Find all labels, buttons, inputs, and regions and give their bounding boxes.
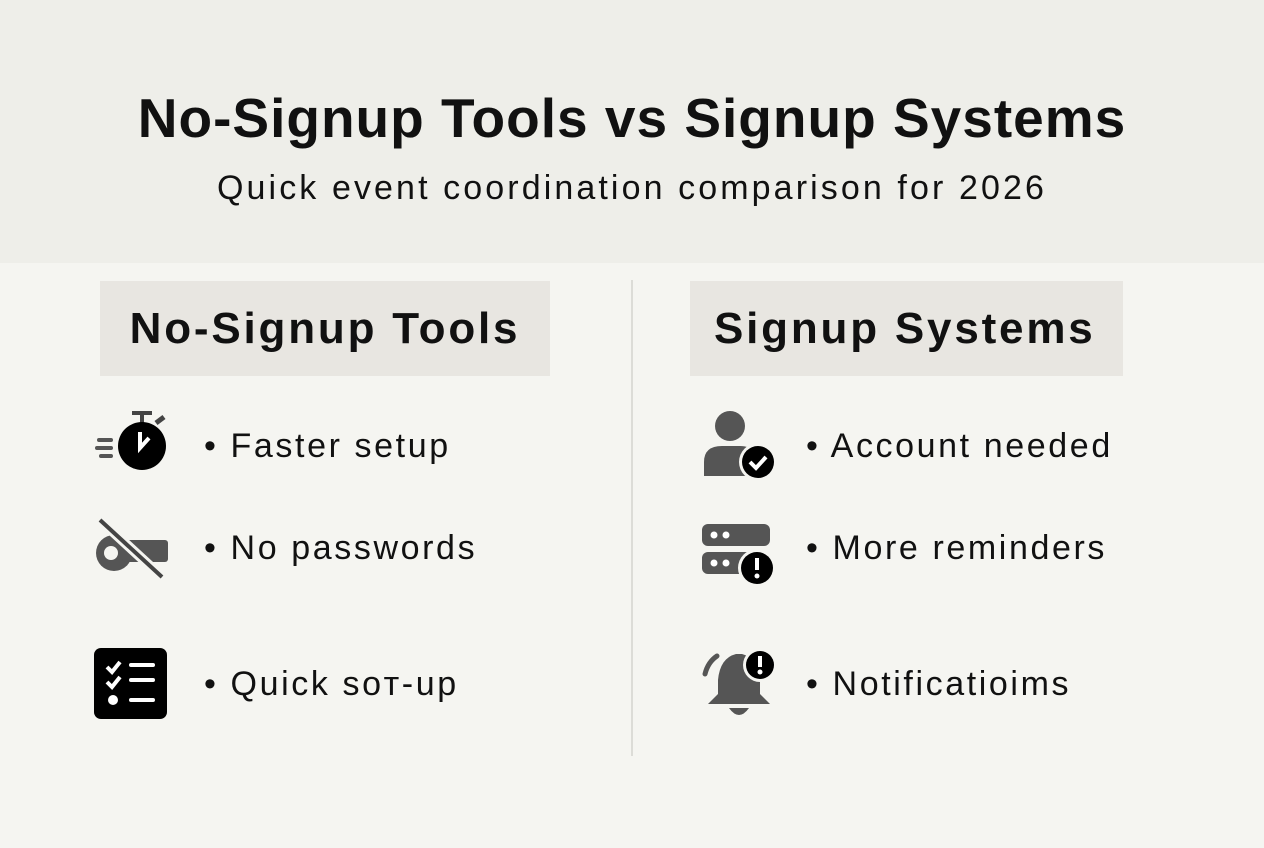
heading: Signup Systems: Signup Systems [714,304,1096,352]
text: Faster setup: • Faster setup [204,427,451,465]
text: Notifications: • Notificatioims [806,665,1071,703]
title: No-Signup Tools vs Signup Systems [138,87,1126,149]
divider [631,280,633,756]
icon: stopwatch [95,411,166,470]
icon: no password key [96,518,168,578]
heading: No-Signup Tools [100,281,550,376]
subtitle: Quick event coordination comparison for 2026 [217,169,1047,207]
icon: server alert [702,524,773,584]
text: Account needed: • Account needed [806,427,1113,465]
icon: bell alert [702,651,774,715]
header band [0,0,1264,263]
text: No passwords: • No passwords [204,529,477,567]
text: Quick sort-up: • Quick soт-up [204,665,459,703]
icon: checklist [94,648,167,719]
heading: No-Signup Tools: No-Signup Tools [130,304,520,352]
icon: account check [704,411,774,478]
heading: Signup Systems [690,281,1123,376]
text: More reminders: • More reminders [806,529,1107,567]
